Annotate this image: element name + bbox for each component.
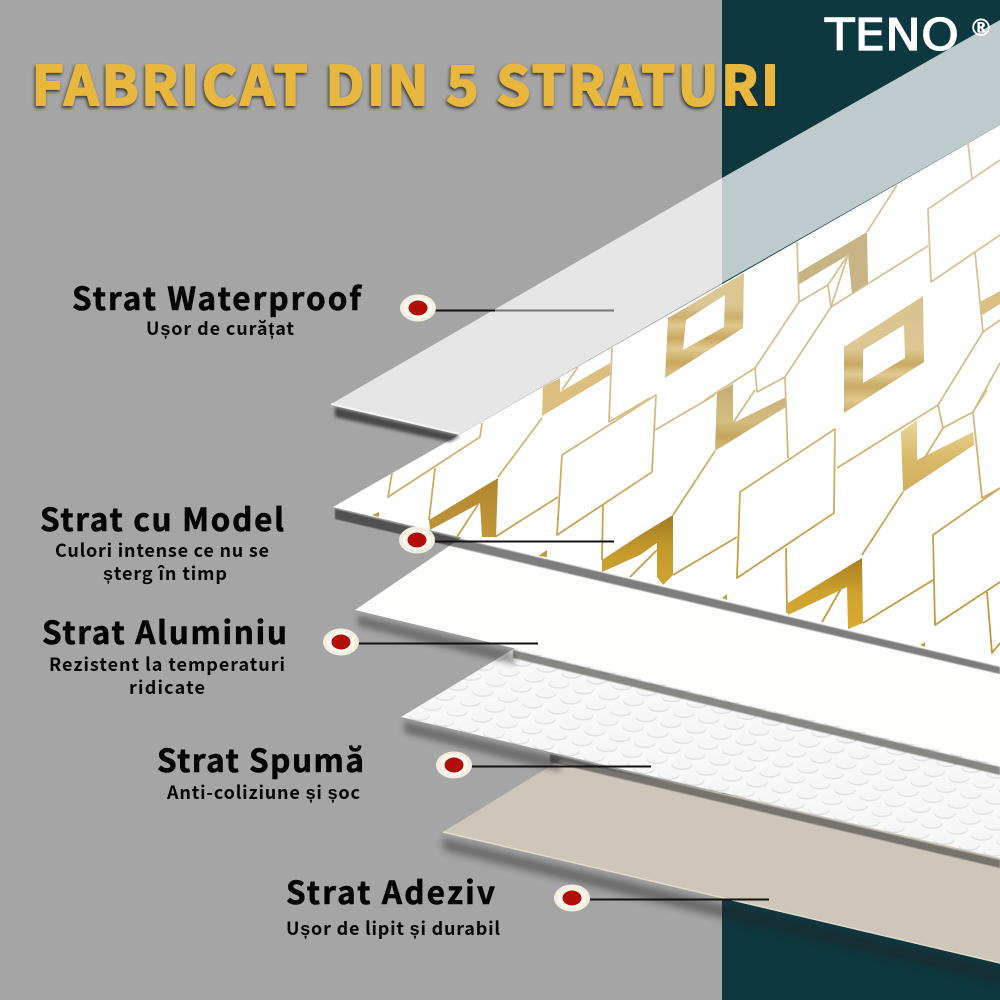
layer 2: patterned sheet xyxy=(333,125,1000,674)
background: grey wall xyxy=(0,0,722,1000)
callout: Strat cu Model: Culori intense ce nu se xyxy=(55,537,269,563)
callout: Strat Aluminiu: Strat Aluminiu xyxy=(42,608,287,654)
logo: TENO: TENO xyxy=(824,10,959,61)
callout: Strat Aluminiu xyxy=(42,608,538,700)
title: FABRICAT DIN 5 STRATURI xyxy=(32,42,779,121)
callout: Strat Aluminiu: Rezistent la temperaturi xyxy=(49,651,285,677)
layer 5: adhesive sheet xyxy=(443,760,1000,983)
callout: Strat Aluminiu: ridicate xyxy=(129,674,205,700)
background: teal wall xyxy=(722,0,1000,1000)
callout: Strat Spumă xyxy=(157,736,651,805)
layer 4: foam sheet xyxy=(401,648,1000,868)
callout: Strat cu Model: Strat cu Model xyxy=(40,495,284,541)
callout: Strat cu Model: șterg în timp xyxy=(103,560,227,586)
logo: TENO: ® xyxy=(969,14,993,42)
callout: Strat cu Model xyxy=(40,495,614,586)
callout: Strat Waterproof: Ușor de curățat xyxy=(146,315,294,341)
callout: Strat Spumă: Strat Spumă xyxy=(157,736,364,782)
layer 1: waterproof transparent film xyxy=(331,20,1000,442)
callout: Strat Waterproof xyxy=(72,274,614,341)
gold pattern xyxy=(372,232,1000,647)
callout: Strat Adeziv: Ușor de lipit și durabil xyxy=(286,915,500,941)
callout: Strat Waterproof: Strat Waterproof xyxy=(72,274,362,320)
callout: Strat Adeziv: Strat Adeziv xyxy=(286,868,495,914)
layer 3: aluminium sheet xyxy=(355,525,1000,775)
callout: Strat Adeziv xyxy=(286,868,769,941)
callout: Strat Spumă: Anti-coliziune și șoc xyxy=(166,779,360,805)
